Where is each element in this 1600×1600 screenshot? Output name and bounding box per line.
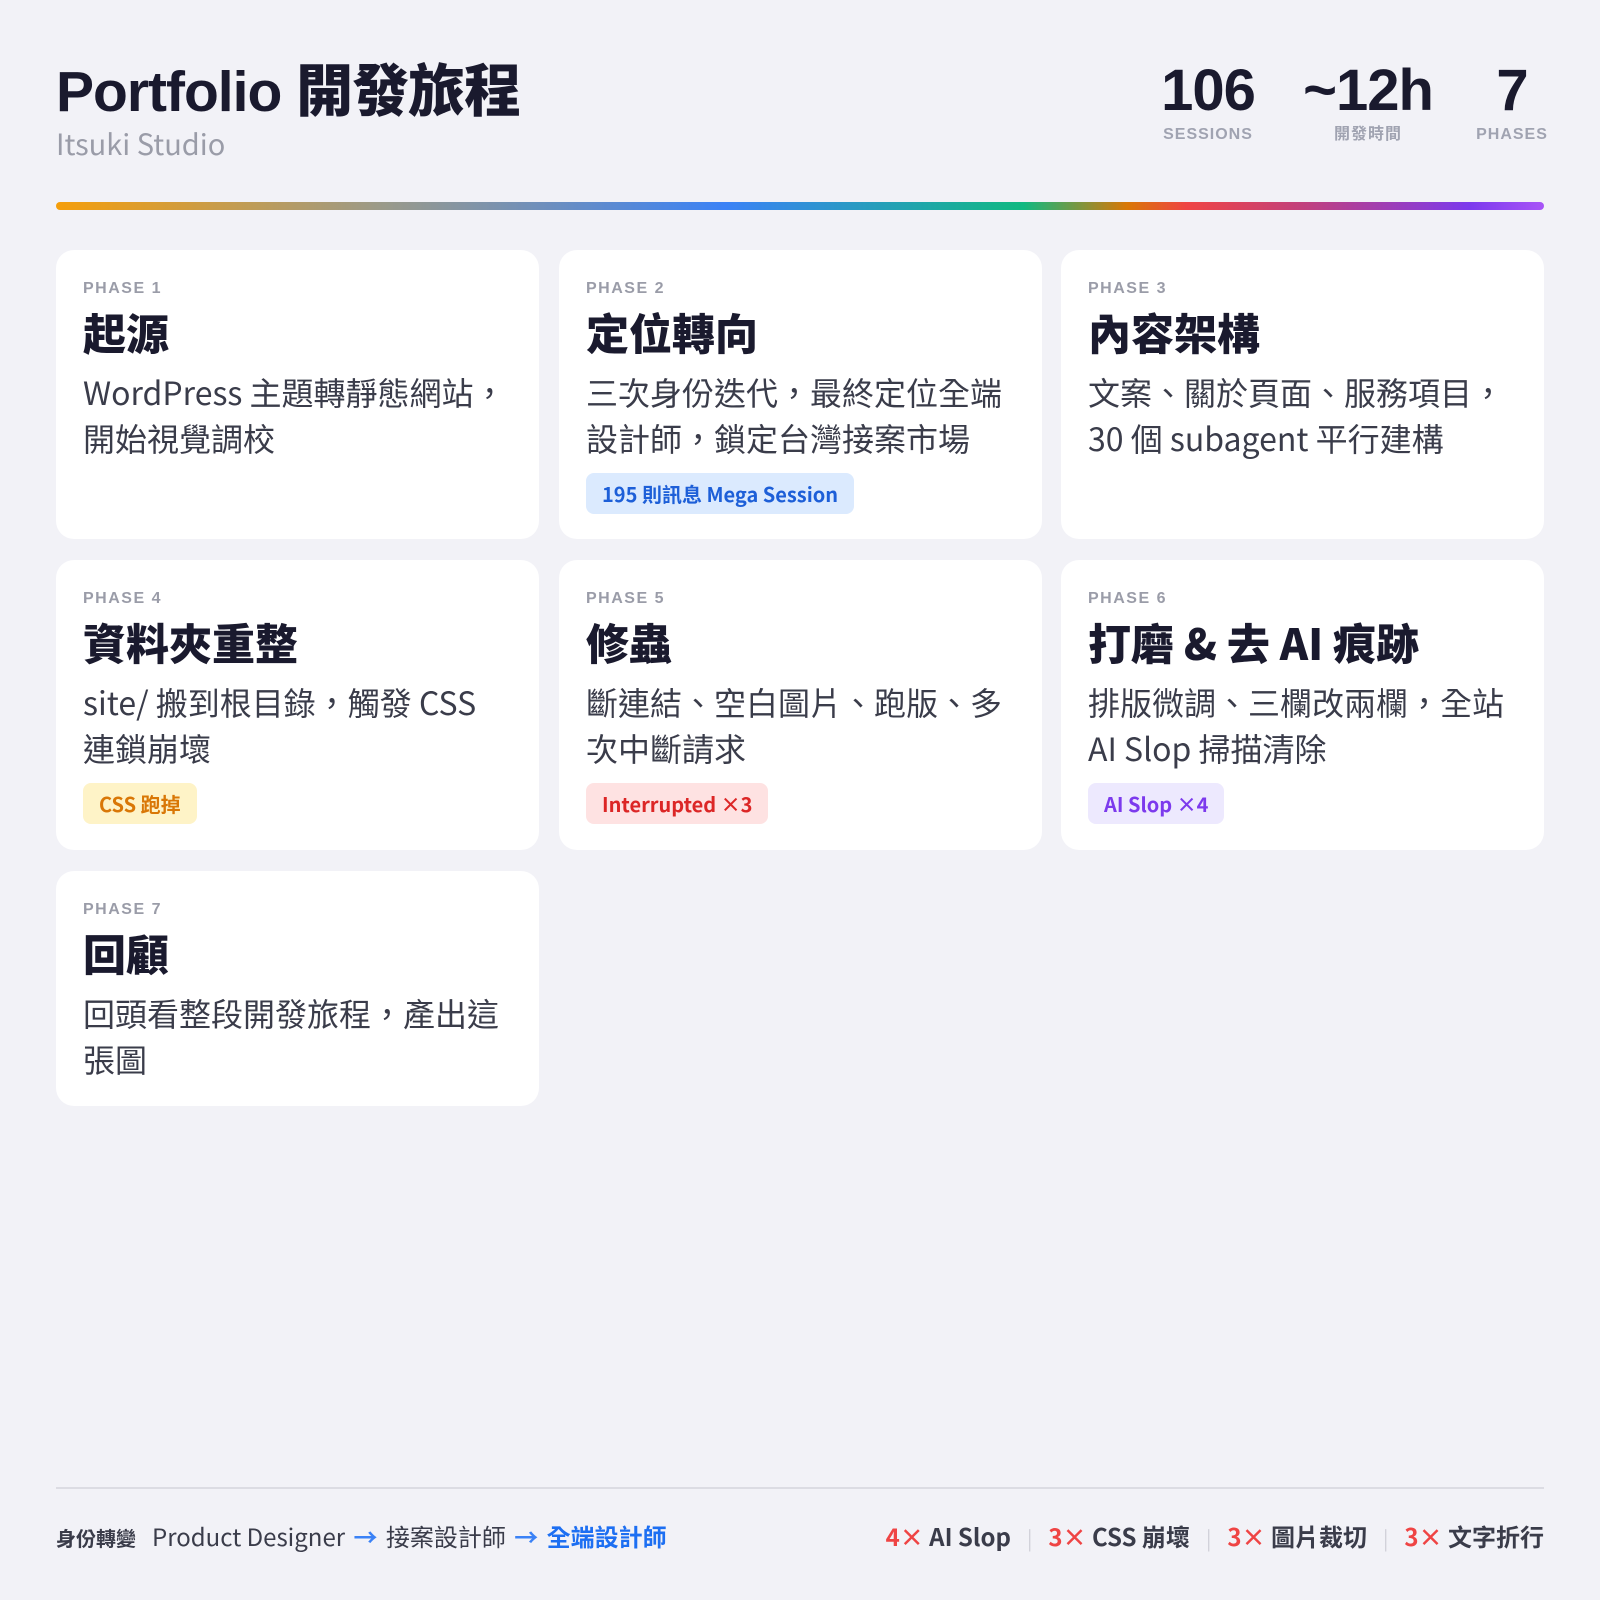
panel: phase 1: 起源 bbox=[83, 301, 169, 363]
subtitle: Itsuki Studio bbox=[56, 122, 225, 164]
stat: sessions: 106 bbox=[1161, 58, 1255, 123]
footer: identity shift: 身份轉變 Product Designer → 接案設計師 → 全端設計師 bbox=[56, 1518, 667, 1553]
panel: phase 7: 張圖 bbox=[83, 1036, 147, 1082]
panel: phase 5: Interrupted ×3 bbox=[602, 789, 752, 818]
panel: phase 4: 資料夾重整 bbox=[83, 611, 298, 673]
stat: phases bbox=[1476, 58, 1548, 143]
panel: phase 6: AI Slop ×4 bbox=[1104, 789, 1208, 818]
stat: hours: 開發時間 bbox=[1334, 126, 1402, 143]
panel: phase 2: PHASE 2 bbox=[586, 280, 665, 297]
panel: phase 4: 連鎖崩壞 bbox=[83, 725, 211, 771]
stat: hours: ~12h bbox=[1303, 58, 1433, 123]
panel: phase 7 bbox=[56, 871, 539, 1106]
panel: phase 6 bbox=[1061, 560, 1544, 850]
panel: phase 3: 30 個 subagent 平行建構 bbox=[1088, 415, 1444, 461]
panel: phase 2: 三次身份迭代，最終定位全端 bbox=[586, 369, 1002, 415]
panel: phase 2: 設計師，鎖定台灣接案市場 bbox=[586, 415, 970, 461]
panel: phase 3: PHASE 3 bbox=[1088, 280, 1167, 297]
panel: phase 4: CSS 跑掉 bbox=[99, 789, 181, 818]
panel: phase 5 bbox=[559, 560, 1042, 850]
panel: phase 6: 打磨 & 去 AI 痕跡 bbox=[1088, 611, 1419, 673]
panel: phase 4: PHASE 4 bbox=[83, 590, 162, 607]
panel: phase 3: 文案、關於頁面、服務項目， bbox=[1088, 369, 1504, 415]
panel: phase 1: PHASE 1 bbox=[83, 280, 162, 297]
panel: phase 6: PHASE 6 bbox=[1088, 590, 1167, 607]
gradient bar bbox=[56, 202, 1544, 210]
panel: phase 5: 修蟲 bbox=[586, 611, 672, 673]
stat: sessions: SESSIONS bbox=[1163, 126, 1253, 143]
panel: phase 7: 回頭看整段開發旅程，產出這 bbox=[83, 990, 499, 1036]
panel: phase 1: 開始視覺調校 bbox=[83, 415, 275, 461]
stat: phases: PHASES bbox=[1476, 126, 1548, 143]
panel: phase 2: 定位轉向 bbox=[586, 301, 758, 363]
panel: phase 7: PHASE 7 bbox=[83, 901, 162, 918]
panel: phase 5: PHASE 5 bbox=[586, 590, 665, 607]
panel: phase 1: WordPress 主題轉靜態網站， bbox=[83, 369, 506, 415]
panel: phase 6: AI Slop 掃描清除 bbox=[1088, 725, 1327, 771]
panel: phase 3 bbox=[1061, 250, 1544, 539]
panel: phase 2 bbox=[559, 250, 1042, 539]
panel: phase 7: 回顧 bbox=[83, 922, 169, 984]
panel: phase 6: 排版微調、三欄改兩欄，全站 bbox=[1088, 679, 1504, 725]
panel: phase 5: 斷連結、空白圖片、跑版、多 bbox=[586, 679, 1002, 725]
panel: phase 4 bbox=[56, 560, 539, 850]
panel: phase 3: 內容架構 bbox=[1088, 301, 1260, 363]
footer: issue counts: 4× AI Slop | 3× CSS 崩壞 | 3× 圖片裁切 | 3× 文字折行 bbox=[886, 1518, 1544, 1553]
panel: phase 1 bbox=[56, 250, 539, 539]
title: Portfolio 開發旅程 bbox=[56, 60, 520, 124]
panel: phase 4: site/ 搬到根目錄，觸發 CSS bbox=[83, 679, 476, 725]
panel: phase 2: 195 則訊息 Mega Session bbox=[602, 479, 838, 508]
stat: phases: 7 bbox=[1496, 58, 1528, 123]
panel: phase 5: 次中斷請求 bbox=[586, 725, 746, 771]
